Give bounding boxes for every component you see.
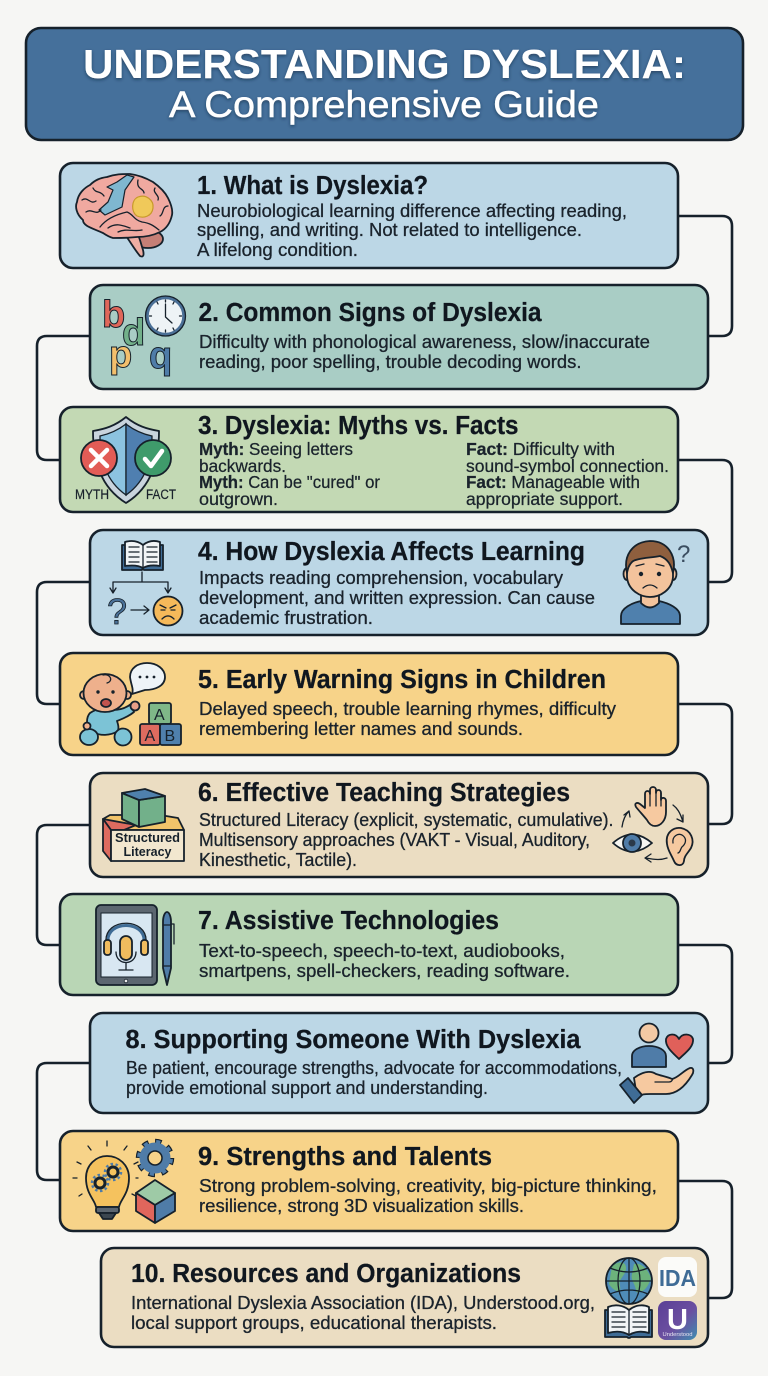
icon: shield with myth and fact: MYTH <box>75 487 109 502</box>
facts column: Fact: Difficulty with <box>466 439 615 459</box>
icon: shield with myth and fact: FACT <box>146 487 176 502</box>
icon: tablet and smartpen <box>96 905 174 985</box>
icon: brain <box>76 174 172 257</box>
body text: smartpens, spell-checkers, reading software. <box>199 960 570 981</box>
icon: IDA logo: IDA <box>659 1265 696 1291</box>
heading: 10. Resources and Organizations <box>131 1260 521 1288</box>
panel: 2 Common Signs <box>90 285 708 389</box>
body text: Kinesthetic, Tactile). <box>199 849 357 870</box>
heading: 8. Supporting Someone With Dyslexia <box>126 1026 581 1054</box>
panel: 6 Effective Teaching Strategies <box>90 773 708 877</box>
title line 1: UNDERSTANDING DYSLEXIA: <box>83 41 686 87</box>
panel: 5 Early Warning Signs <box>60 653 678 755</box>
icon: structured literacy blocks: Structured <box>115 830 180 845</box>
heading: 6. Effective Teaching Strategies <box>198 779 570 807</box>
body text <box>126 1057 622 1098</box>
panel: 3 Myths vs Facts <box>60 407 678 512</box>
heading: 7. Assistive Technologies <box>198 907 499 935</box>
connector: section 8 to 9 <box>37 1063 90 1180</box>
icon: book leading to frustration: ? <box>107 591 127 632</box>
body text <box>199 809 614 870</box>
body text: Text-to-speech, speech-to-text, audiobooks, <box>199 940 565 961</box>
icon: letters and clock: p <box>109 334 132 376</box>
icon: letters and clock <box>102 294 186 377</box>
icon: open book <box>605 1305 652 1338</box>
icon: structured literacy blocks: Literacy <box>124 844 172 859</box>
body text <box>199 567 595 628</box>
myths column: backwards. <box>199 456 286 476</box>
body text: remembering letter names and sounds. <box>199 718 523 739</box>
panel: 9 Strengths and Talents <box>60 1131 678 1231</box>
body text: Be patient, encourage strengths, advocate for accommodations, <box>126 1057 622 1078</box>
panel: 7 Assistive Technologies <box>60 894 678 995</box>
icon: baby with speech bubble and blocks <box>80 663 181 746</box>
connector: section 3 to 4 <box>678 460 732 582</box>
body text: development, and written expression. Can cause <box>199 587 595 608</box>
body text <box>199 940 570 981</box>
icon: structured literacy blocks <box>103 789 184 861</box>
body text: reading, poor spelling, trouble decoding words. <box>199 351 582 372</box>
connector: section 9 to 10 <box>678 1181 732 1298</box>
body text: Strong problem-solving, creativity, big-picture thinking, <box>199 1175 657 1196</box>
body text: Delayed speech, trouble learning rhymes, difficulty <box>199 698 617 719</box>
myths column: outgrown. <box>199 489 278 509</box>
body text <box>199 698 617 739</box>
icon: confused person: ? <box>677 541 690 568</box>
body text: Structured Literacy (explicit, systematic, cumulative). <box>199 809 614 830</box>
body text: Impacts reading comprehension, vocabulary <box>199 567 564 588</box>
icon: baby with speech bubble and blocks: A <box>144 728 156 745</box>
heading: 2. Common Signs of Dyslexia <box>198 299 542 327</box>
facts column <box>466 439 669 509</box>
icon: Understood logo: U <box>667 1304 688 1336</box>
body text: A lifelong condition. <box>197 239 358 260</box>
body text: provide emotional support and understanding. <box>126 1077 488 1098</box>
myths column <box>199 439 380 509</box>
connector: section 6 to 7 <box>37 825 90 945</box>
connector: section 5 to 6 <box>678 704 732 824</box>
body text: Neurobiological learning difference affecting reading, <box>197 200 627 221</box>
body text <box>199 1175 657 1216</box>
icon: confused person <box>621 541 690 624</box>
body text: International Dyslexia Association (IDA), Understood.org, <box>131 1292 595 1313</box>
icon: baby with speech bubble and blocks: B <box>164 728 175 745</box>
body text <box>131 1292 595 1333</box>
body text: academic frustration. <box>199 607 373 628</box>
icon: Understood logo <box>658 1301 697 1340</box>
panel: 10 Resources and Organizations <box>101 1248 708 1347</box>
body text: Multisensory approaches (VAKT - Visual, Auditory, <box>199 829 590 850</box>
icon: lightbulb, gear and cube <box>73 1141 175 1223</box>
heading: 1. What is Dyslexia? <box>197 172 428 200</box>
icon: globe <box>606 1258 652 1304</box>
title banner <box>26 28 743 140</box>
body text: spelling, and writing. Not related to intelligence. <box>197 219 582 240</box>
connector: section 4 to 5 <box>37 582 90 704</box>
panel: 1 What is Dyslexia <box>60 163 678 268</box>
title line 2: A Comprehensive Guide <box>169 84 599 125</box>
body text: resilience, strong 3D visualization skills. <box>199 1195 524 1216</box>
myths column: Myth: Seeing letters <box>199 439 353 459</box>
heading: 4. How Dyslexia Affects Learning <box>198 538 585 566</box>
facts column: Fact: Manageable with <box>466 472 640 492</box>
icon: person, heart and caring hand <box>620 1024 693 1103</box>
panel: 8 Supporting Someone <box>90 1013 708 1113</box>
icon: baby with speech bubble and blocks: A <box>154 707 165 724</box>
panel: 4 How Dyslexia Affects Learning <box>90 530 708 635</box>
heading: 3. Dyslexia: Myths vs. Facts <box>198 412 518 440</box>
icon: letters and clock: d <box>122 312 145 354</box>
icon: IDA logo <box>658 1257 697 1297</box>
icon: letters and clock: q <box>149 335 172 377</box>
connector: section 1 to 2 <box>678 216 732 336</box>
connector: section 2 to 3 <box>37 336 90 460</box>
icon: multisensory hand, ear and eye <box>613 787 693 865</box>
facts column: appropriate support. <box>466 489 623 509</box>
heading: 9. Strengths and Talents <box>198 1143 492 1171</box>
icon: Understood logo: Understood <box>662 1332 693 1338</box>
icon: shield with myth and fact <box>75 417 176 503</box>
body text <box>197 200 627 260</box>
body text <box>199 331 650 372</box>
icon: letters and clock: b <box>102 294 125 336</box>
connector: section 7 to 8 <box>678 945 732 1063</box>
heading: 5. Early Warning Signs in Children <box>198 666 606 694</box>
body text: Difficulty with phonological awareness, slow/inaccurate <box>199 331 650 352</box>
facts column: sound-symbol connection. <box>466 456 669 476</box>
icon: book leading to frustration <box>107 541 182 632</box>
myths column: Myth: Can be "cured" or <box>199 472 380 492</box>
body text: local support groups, educational therapists. <box>131 1312 497 1333</box>
